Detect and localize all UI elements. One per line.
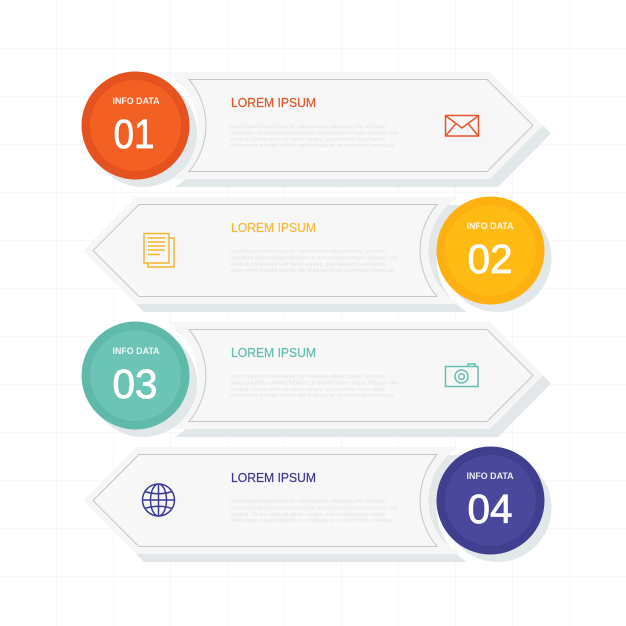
body text 02: volutpat. Ut wisi enim ad minim veniam, quis nostrud exerci tation xyxy=(230,262,385,268)
body text 01: Lorem ipsum dolor sit amet, consectetuer adipiscing elit, sed diam xyxy=(230,124,387,130)
body text 01 xyxy=(230,124,399,149)
body text 03: nonummy nibh euismod tincidunt ut laoreet dolore magna aliquam erat xyxy=(230,380,399,386)
heading 04: LOREM IPSUM xyxy=(231,470,316,485)
body text 04: nonummy nibh euismod tincidunt ut laoreet dolore magna aliquam erat xyxy=(230,505,399,511)
badge 01: 01 xyxy=(114,111,154,157)
arrow panel shape xyxy=(167,72,551,187)
body text 03 xyxy=(230,374,399,399)
body text 03: volutpat. Ut wisi enim ad minim veniam, quis nostrud exerci tation xyxy=(230,387,385,393)
badge 04 xyxy=(436,446,552,562)
panel: step 03 xyxy=(82,322,551,437)
badge 03: 03 xyxy=(112,361,158,407)
body text 01: ullamcorper suscipit lobortis nisl ut aliquip ex ea commodo consequat. xyxy=(230,143,395,149)
badge 02: 02 xyxy=(468,236,512,282)
badge 02: INFO DATA xyxy=(466,221,514,231)
arrow panel shape xyxy=(83,197,467,312)
badge 01: INFO DATA xyxy=(112,96,160,106)
body text 04: Lorem ipsum dolor sit amet, consectetuer adipiscing elit, sed diam xyxy=(230,499,387,505)
heading 03: LOREM IPSUM xyxy=(231,345,316,360)
heading 01: LOREM IPSUM xyxy=(231,95,316,110)
panel: step 02 xyxy=(83,196,552,312)
body text 01: nonummy nibh euismod tincidunt ut laoreet dolore magna aliquam erat xyxy=(230,130,399,136)
badge 01 xyxy=(82,72,197,187)
panel: step 01 xyxy=(82,72,551,187)
badge 03: INFO DATA xyxy=(112,346,160,356)
body text 02: Lorem ipsum dolor sit amet, consectetuer adipiscing elit, sed diam xyxy=(230,249,387,255)
body text 02: ullamcorper suscipit lobortis nisl ut aliquip ex ea commodo consequat. xyxy=(230,268,395,274)
icon: camera xyxy=(446,364,478,386)
body text 04: volutpat. Ut wisi enim ad minim veniam, quis nostrud exerci tation xyxy=(230,512,385,518)
heading 02: LOREM IPSUM xyxy=(231,220,316,235)
body text 01: volutpat. Ut wisi enim ad minim veniam, quis nostrud exerci tation xyxy=(230,137,385,143)
body text 03: Lorem ipsum dolor sit amet, consectetuer adipiscing elit, sed diam xyxy=(230,374,387,380)
body text 03: ullamcorper suscipit lobortis nisl ut aliquip ex ea commodo consequat. xyxy=(230,393,395,399)
body text 02 xyxy=(230,249,399,274)
badge 04: INFO DATA xyxy=(466,471,514,481)
body text 04: ullamcorper suscipit lobortis nisl ut aliquip ex ea commodo consequat. xyxy=(230,518,395,524)
icon: documents xyxy=(144,234,174,267)
icon: globe xyxy=(142,484,174,516)
body text 04 xyxy=(230,499,399,524)
icon: envelope xyxy=(446,116,478,136)
badge 04: 04 xyxy=(468,486,512,532)
arrow panel shape xyxy=(83,447,467,562)
body text 02: nonummy nibh euismod tincidunt ut laoreet dolore magna aliquam erat xyxy=(230,255,399,261)
badge 02 xyxy=(436,196,552,312)
badge 03 xyxy=(82,322,197,437)
arrow panel shape xyxy=(167,322,551,437)
panel: step 04 xyxy=(83,446,552,562)
